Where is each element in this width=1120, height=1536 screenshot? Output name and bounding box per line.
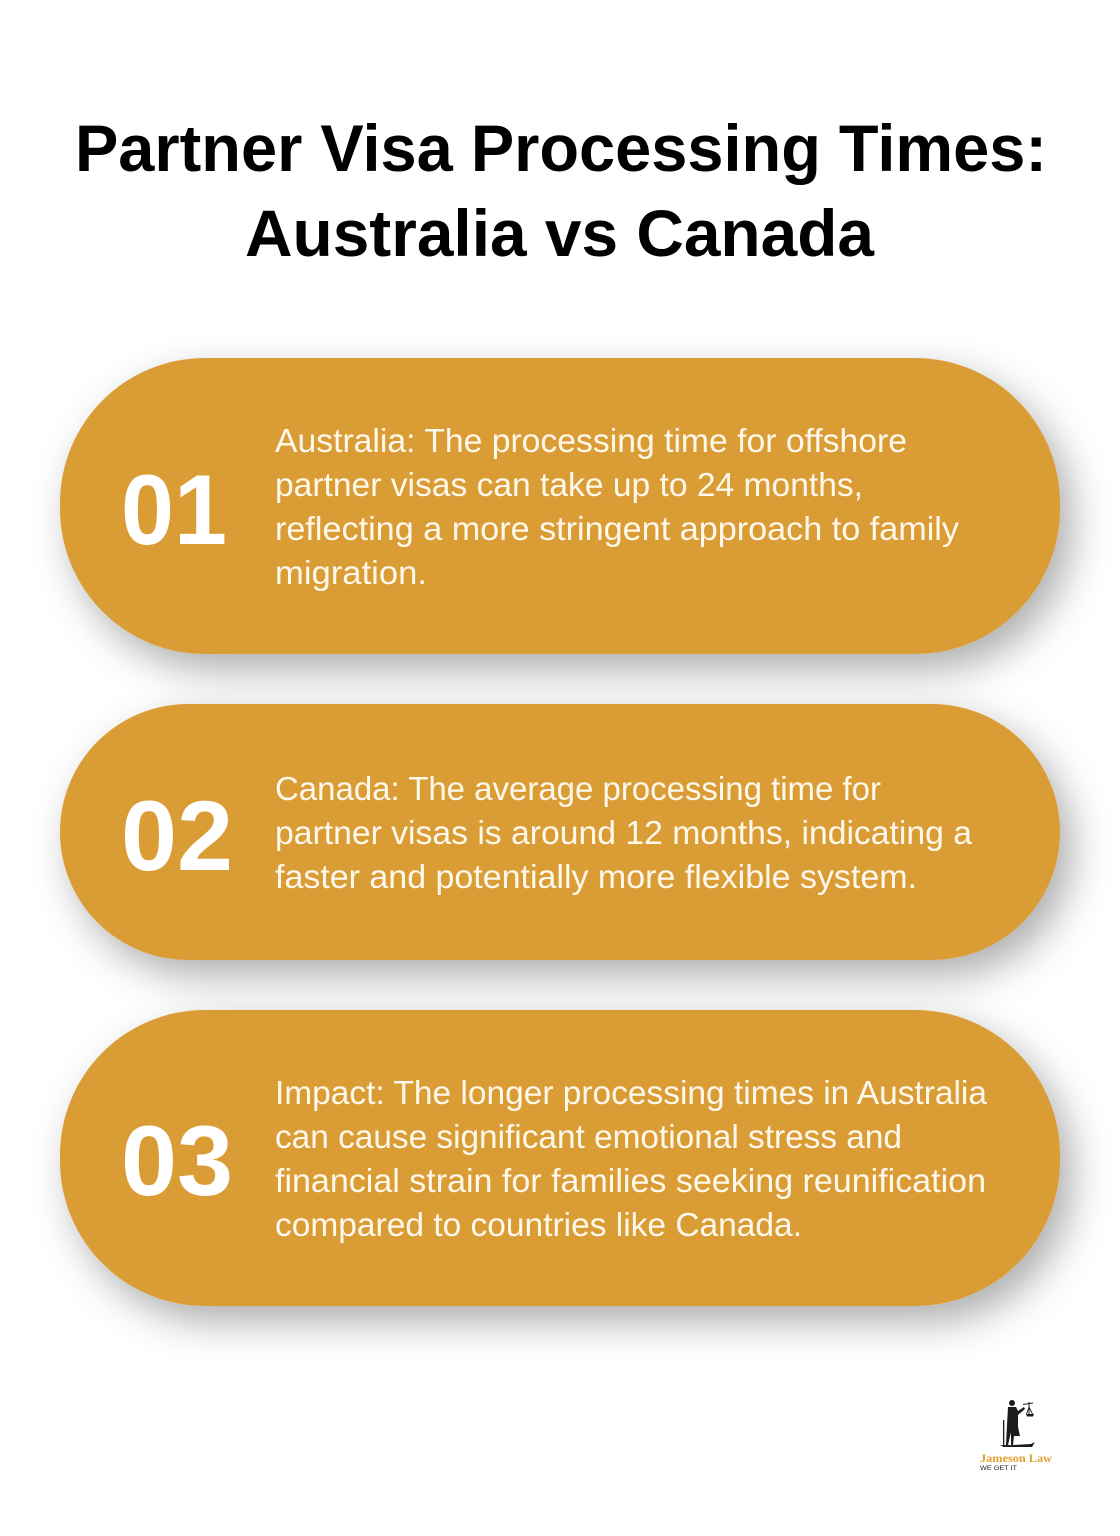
text block: Australia: partner visas can take up to 24 months, (275, 466, 863, 503)
number 01: 01 (121, 454, 227, 565)
text block: Australia: migration. (275, 554, 427, 591)
text block: Impact: financial strain for families seeking reunification (275, 1162, 986, 1199)
title: Australia vs Canada (245, 196, 875, 270)
text block: Impact: compared to countries like Canada. (275, 1206, 802, 1243)
panel: Canada (60, 704, 1060, 960)
icon: lady justice (1000, 1400, 1035, 1447)
text block: Canada: partner visas is around 12 months, indicating a (275, 814, 973, 851)
text block: Australia: reflecting a more stringent approach to family (275, 510, 960, 547)
logo: Jameson Law (980, 1400, 1053, 1472)
number 02: 02 (121, 780, 233, 891)
text block: Canada: Canada: The average processing time for (275, 770, 881, 807)
text block: Australia (275, 422, 960, 591)
text block: Impact: Impact: The longer processing times in Australia (275, 1074, 988, 1111)
brand name: Jameson Law (980, 1453, 1053, 1465)
text block: Canada (275, 770, 973, 895)
text block: Impact (275, 1074, 988, 1243)
title (75, 111, 1047, 270)
panel: Australia (60, 358, 1060, 654)
tagline: WE GET IT (980, 1465, 1017, 1472)
title: Partner Visa Processing Times: (75, 111, 1047, 185)
text block: Impact: can cause significant emotional stress and (275, 1118, 902, 1155)
number 03: 03 (121, 1105, 233, 1216)
panel: Impact (60, 1010, 1060, 1306)
text block: Australia: Australia: The processing time for offshore (275, 422, 907, 459)
text block: Canada: faster and potentially more flexible system. (275, 858, 917, 895)
